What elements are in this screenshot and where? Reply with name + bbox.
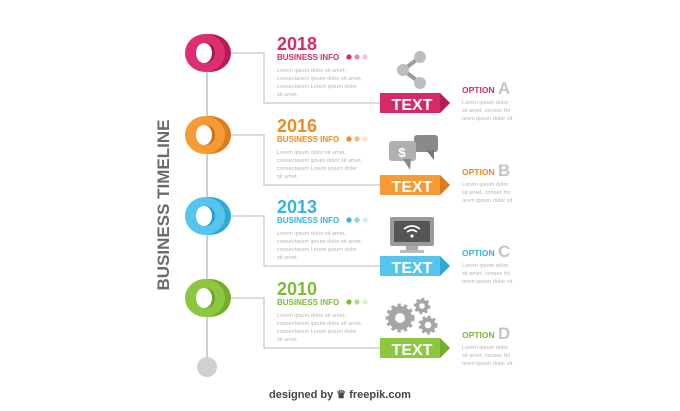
section: 2016: consectarem Lorem ipsum dolor (277, 166, 357, 172)
business info (277, 53, 368, 62)
section: 2016: BUSINESS INFO (277, 135, 339, 144)
section: 2016: sit amet, consec fol (462, 190, 510, 196)
lorem: consectarem ipsum dolor sit amet, (277, 76, 363, 82)
section: 2016: orem ipsum dolar sit (462, 198, 513, 204)
section: 2010: BUSINESS INFO (277, 298, 339, 307)
banner (380, 93, 450, 114)
section: 2013: consectarem Lorem ipsum dolor (277, 247, 357, 253)
icon: monitor wifi (390, 217, 434, 253)
section: 2013: sit amet. (277, 255, 299, 261)
icon: chat bubbles dollar: $ (398, 145, 406, 160)
section: 2013: sit amet, consec fol (462, 271, 510, 277)
business info: BUSINESS INFO (277, 53, 339, 62)
icon: share (397, 51, 426, 89)
section: 2010: D (498, 324, 510, 343)
section: 2010: Lorem ipsum dolor sit amet, (277, 313, 346, 319)
section: 2013: Lorem ipsum dolor sit amet, (277, 231, 346, 237)
ring (185, 34, 231, 72)
icon: chat bubbles dollar (389, 135, 438, 170)
section: 2013: OPTION (462, 248, 495, 258)
option: sit amet, consec fol (462, 108, 510, 114)
section: 2010: sit amet. (277, 337, 299, 343)
section: 2016: B (498, 161, 510, 180)
section: 2010: orem ipsum dolar sit (462, 361, 513, 367)
connector (228, 53, 382, 103)
section: 2013: Lorem ipsum dolor (462, 263, 508, 269)
section: 2013: orem ipsum dolar sit (462, 279, 513, 285)
section: 2010: OPTION (462, 330, 495, 340)
section: 2013: TEXT (392, 260, 433, 277)
option: Lorem ipsum dolor (462, 100, 508, 106)
section: 2016: OPTION (462, 167, 495, 177)
section: 2013 (185, 197, 513, 285)
section: 2016: sit amet. (277, 174, 299, 180)
section: 2016: Lorem ipsum dolor (462, 182, 508, 188)
option: A (498, 79, 510, 98)
section: 2010: TEXT (392, 342, 433, 359)
footer credit: designed by ♛ freepik.com (269, 389, 411, 401)
section: 2013: BUSINESS INFO (277, 216, 339, 225)
end dot (197, 357, 217, 377)
section: 2010: 2010 (277, 279, 317, 299)
section: 2016: consectarem ipsum dolor sit amet, (277, 158, 363, 164)
section: 2010: consectarem ipsum dolor sit amet, (277, 321, 363, 327)
section: 2010: Lorem ipsum dolor (462, 345, 508, 351)
banner: TEXT (392, 97, 433, 114)
section: 2010 (185, 279, 513, 367)
section: 2016: TEXT (392, 179, 433, 196)
lorem: sit amet. (277, 92, 299, 98)
year: 2018 (277, 34, 317, 54)
option (462, 79, 513, 122)
section: 2016: 2016 (277, 116, 317, 136)
title: business timeline: BUSINESS TIMELINE (154, 120, 173, 290)
section: 2016 (185, 116, 513, 204)
section: 2010: sit amet, consec fol (462, 353, 510, 359)
option: OPTION (462, 85, 495, 95)
section: 2013: C (498, 242, 510, 261)
lorem (277, 68, 363, 98)
option: orem ipsum dolar sit (462, 116, 513, 122)
timeline vertical line (206, 53, 208, 367)
icon: gears (388, 300, 436, 332)
section: 2013: 2013 (277, 197, 317, 217)
section: 2010: consectarem Lorem ipsum dolor (277, 329, 357, 335)
section: 2016: Lorem ipsum dolor sit amet, (277, 150, 346, 156)
section: 2013: consectarem ipsum dolor sit amet, (277, 239, 363, 245)
lorem: consectarem Lorem ipsum dolor (277, 84, 357, 90)
lorem: Lorem ipsum dolor sit amet, (277, 68, 346, 74)
section: 2018 (185, 34, 513, 122)
